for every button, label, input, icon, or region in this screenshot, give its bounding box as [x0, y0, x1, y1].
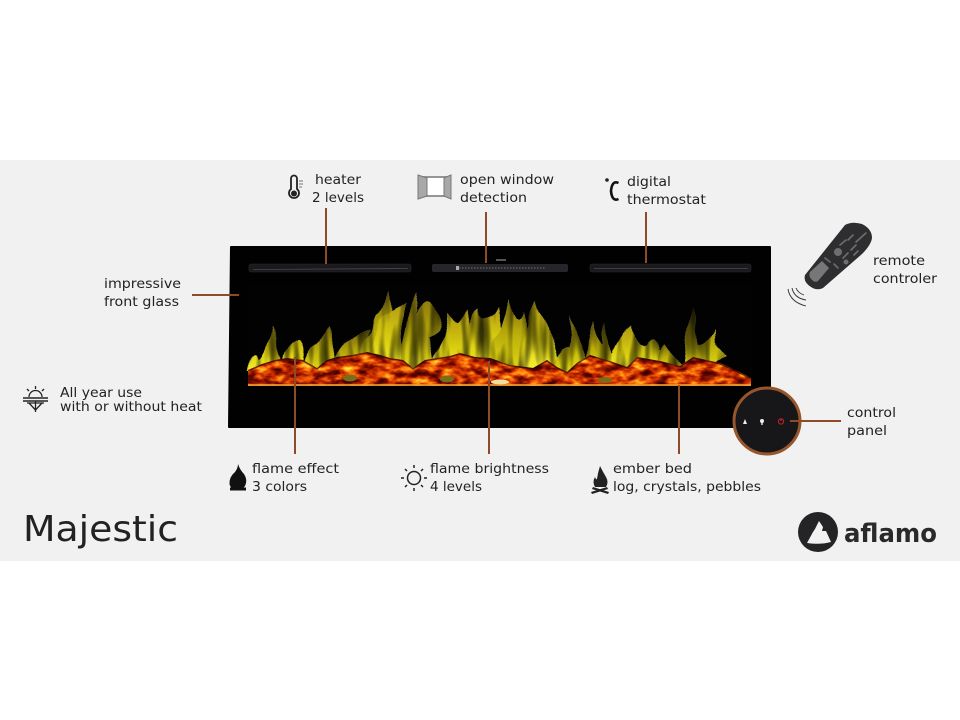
label: digital thermostat: [605, 174, 706, 208]
icon: brightness button: [760, 419, 764, 425]
label: ember bed: ember bed: [613, 461, 692, 477]
icon: open window: [418, 175, 451, 199]
icon: flame: [229, 464, 246, 490]
icon: degrees celsius: [605, 178, 618, 200]
label: flame brightness: flame brightness: [430, 461, 549, 477]
label: impressive front glass: impressive: [104, 276, 181, 292]
logo mark: [798, 512, 838, 552]
label: heater: [289, 172, 364, 206]
label: remote controler: [788, 223, 937, 306]
label: all year use: [23, 385, 202, 415]
label: open window detection: detection: [460, 190, 527, 206]
label: open window detection: open window: [460, 172, 554, 188]
label: flame brightness: [401, 461, 549, 495]
fireplace body: [228, 246, 771, 428]
label: flame effect: [229, 461, 339, 495]
icon: flame button: [743, 419, 747, 424]
label: flame effect: flame effect: [252, 461, 339, 477]
right heater vent: [590, 264, 751, 272]
connector line: [790, 420, 841, 422]
logo: aflamo: aflamo: [844, 519, 937, 549]
icon: signal waves: [788, 288, 806, 306]
icon: remote control: [788, 223, 872, 306]
control panel magnifier: [734, 388, 800, 454]
label: digital thermostat: thermostat: [627, 192, 706, 208]
flames: [249, 292, 730, 372]
label: ember bed: log, crystals, pebbles: [613, 479, 761, 495]
label: all year use: All year use: [60, 385, 142, 401]
label: heater: heater: [315, 172, 361, 188]
icon: thermometer: [289, 176, 303, 198]
grey background band: [0, 160, 960, 561]
label: open window detection: [418, 172, 554, 206]
label: digital thermostat: digital: [627, 174, 671, 190]
fireplace: [228, 246, 771, 428]
label: remote controler: remote: [873, 253, 925, 269]
icon: sun and snowflake: [23, 386, 48, 412]
control panel callout: panel: [847, 423, 887, 439]
left heater vent: [249, 264, 411, 272]
icon: power button: [778, 418, 784, 424]
label: heater: 2 levels: [312, 190, 364, 206]
icon: campfire: [591, 466, 609, 494]
logo: aflamo: [798, 512, 937, 552]
centre display strip: [432, 259, 568, 272]
label: flame effect: 3 colors: [252, 479, 307, 495]
label: ember bed: [591, 461, 761, 495]
control panel callout: control: [847, 405, 896, 421]
label: remote controler: controler: [873, 271, 937, 287]
icon: sun: [401, 465, 427, 491]
infographic canvas: [0, 160, 960, 561]
ember bed: [248, 350, 752, 387]
label: impressive front glass: [104, 276, 181, 310]
control panel callout: [734, 388, 896, 454]
title: Majestic: [23, 509, 178, 550]
label: flame brightness: 4 levels: [430, 479, 482, 495]
label: impressive front glass: front glass: [104, 294, 179, 310]
callout lines: [192, 208, 679, 454]
label: all year use: with or without heat: [60, 399, 202, 415]
firebox: [249, 285, 751, 387]
